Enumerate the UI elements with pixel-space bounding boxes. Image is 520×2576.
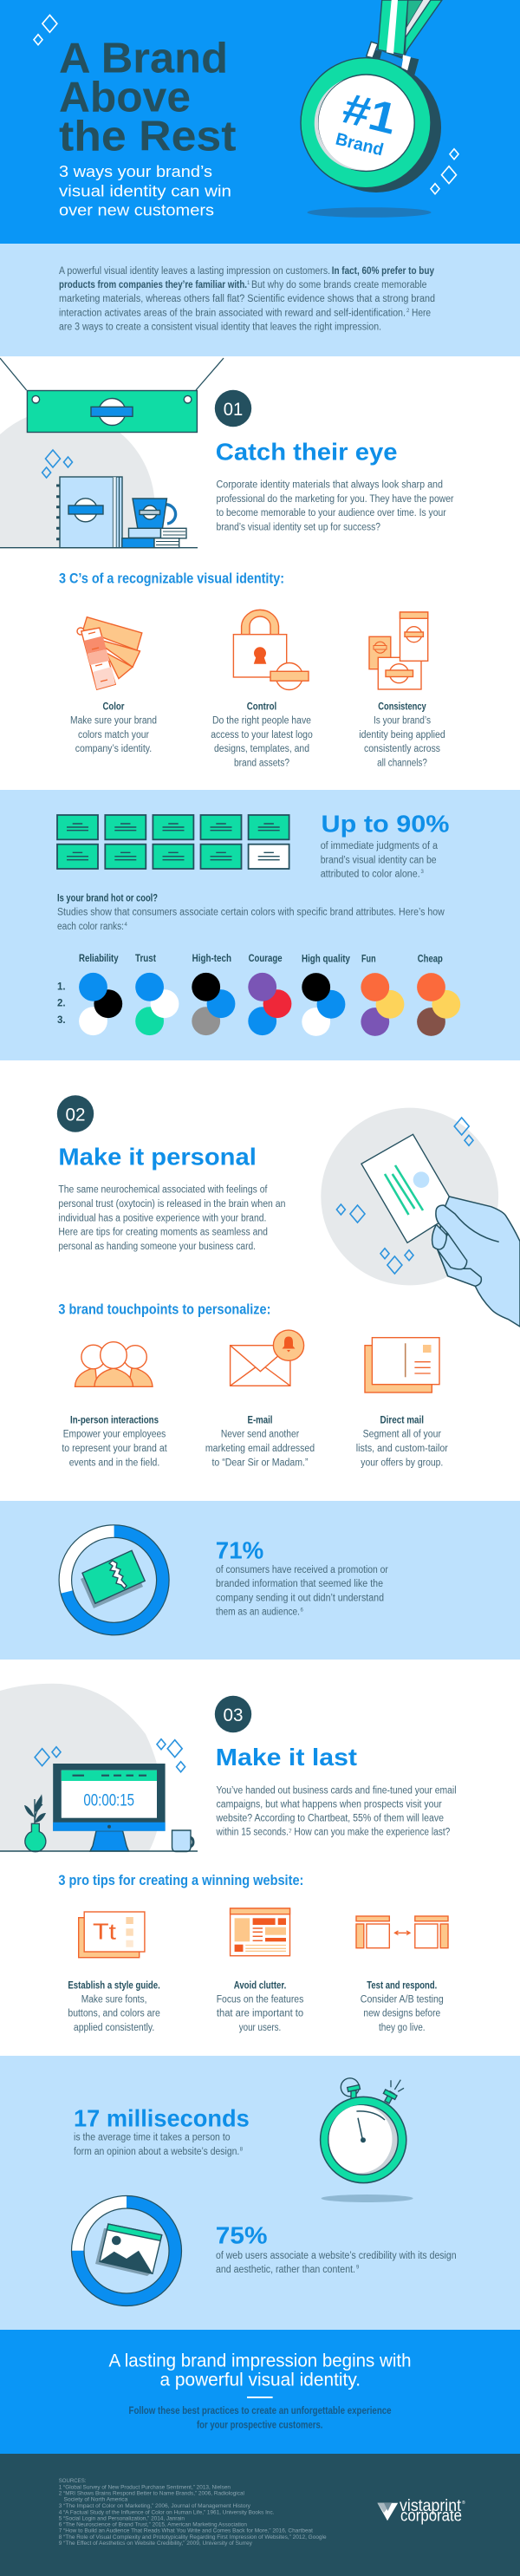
icon: sparkles left (34, 15, 57, 45)
icon: people (75, 1342, 153, 1386)
sources: 3 “The Impact of Color on Marketing,” 2006, Journal of Management History (59, 2503, 251, 2509)
text: direct mail: your offers by group. (361, 1458, 443, 1468)
subheading: 3 pro tips for creating a winning website: (58, 1872, 303, 1888)
illustration: hand with business card (321, 1108, 520, 1327)
column labels: High-tech (192, 954, 231, 964)
text: consistency: Consistency (378, 701, 426, 712)
icon: a/b test (356, 1916, 448, 1948)
cta text: for your prospective customers. (197, 2420, 322, 2430)
text: avoid clutter: your users. (239, 2023, 281, 2033)
paragraph (217, 480, 454, 532)
stat: up to 90%: of immediate judgments of a (321, 841, 439, 851)
paragraph: personal trust (oxytocin) is released in the brain when an (58, 1199, 285, 1210)
text: consistency: consistently across (364, 744, 440, 754)
cta heading (109, 2351, 411, 2390)
logo: vistaprint corporate: corporate (400, 2507, 462, 2525)
sources: 2 “MRI Shows Brains Respond Better to Name Brands,” 2006, Radiological (59, 2491, 245, 2497)
rank numbers: 2. (57, 998, 66, 1008)
stat: 71%: of consumers have received a promotion or (216, 1565, 388, 1575)
text: direct mail (356, 1416, 448, 1468)
icon: web layout (231, 1908, 289, 1956)
stat: 71%: 71% (216, 1537, 263, 1564)
stat: 17 milliseconds: is the average time it takes a person to (74, 2133, 231, 2143)
paragraph: campaigns, but what happens when prospects visit your (217, 1800, 442, 1810)
subheading: 3 C’s of a recognizable visual identity: (59, 570, 284, 586)
text: hot or cool: 4 (125, 923, 128, 928)
text: hot or cool: Studies show that consumers associate certain colors with specific brand attributes. Here’s how (57, 908, 445, 918)
stat: up to 90%: 3 (421, 870, 425, 875)
logo: vistaprint corporate: ® (462, 2500, 465, 2506)
heading: Make it personal (58, 1143, 257, 1170)
stat: 75%: and aesthetic, rather than content. (216, 2265, 355, 2275)
stat: 17 milliseconds: 8 (240, 2147, 244, 2152)
title: A Brand (59, 35, 228, 82)
column labels: Fun (361, 955, 376, 965)
stat: 71% (216, 1537, 388, 1618)
text: hot or cool: each color ranks: (57, 922, 124, 932)
icon: consistency cards (369, 612, 428, 689)
text: in-person: events and in the field. (69, 1458, 159, 1468)
paragraph: website? According to Chartbeat, 55% of them will leave (216, 1814, 444, 1824)
rank numbers: 3. (57, 1015, 66, 1026)
icon: color swatches (77, 617, 142, 689)
subheading: 3 brand touchpoints to personalize: (58, 1301, 270, 1317)
icon: medal: Brand (334, 130, 386, 160)
text: email: to “Dear Sir or Madam.” (211, 1458, 309, 1468)
icon: style guide: Tt (93, 1919, 117, 1945)
panel: speed and credibility stats (0, 2056, 520, 2330)
text: in-person: to represent your brand at (62, 1444, 167, 1454)
panel: intro (0, 244, 520, 356)
paragraph: individual has a positive experience with your brand. (58, 1213, 266, 1223)
panel: hero (0, 0, 520, 244)
subtitle: visual identity can win (59, 182, 231, 199)
text: in-person: Empower your employees (63, 1430, 166, 1440)
text: in-person (62, 1416, 167, 1468)
text: hot or cool: Is your brand hot or cool? (57, 893, 158, 903)
stat: 75%: of web users associate a website’s credibility with its design (216, 2251, 457, 2261)
stat: up to 90% (321, 810, 450, 879)
text: control: brand assets? (234, 758, 289, 768)
step number 02 (57, 1095, 94, 1132)
stat: 17 milliseconds: 17 milliseconds (74, 2105, 250, 2132)
sources: 4 “A Factual Study of the Influence of Color on Human Life,” 1961, University Books Inc. (59, 2509, 275, 2515)
sources: 5 “Social Login and Personalization,” 2014, Janrain (59, 2515, 185, 2521)
panel: footer (0, 2454, 520, 2576)
illustration: hanging sign and desk (0, 358, 224, 548)
text: consistency: all channels? (377, 758, 427, 768)
panel: intro: interaction activates areas of the brain associated with reward and self-identification. (59, 308, 406, 318)
stat: 75% (216, 2221, 457, 2275)
sources: SOURCES: (59, 2478, 87, 2484)
paragraph: The same neurochemical associated with feelings of (58, 1185, 268, 1196)
text: color: Color (102, 701, 125, 712)
subtitle: 3 ways your brand’s (59, 162, 212, 180)
paragraph: You’ve handed out business cards and fine-tuned your email (217, 1785, 456, 1796)
rank numbers: 1. (57, 982, 66, 993)
panel: intro: But why do some brands create memorable (251, 280, 426, 290)
paragraph: Corporate identity materials that always look sharp and (217, 480, 443, 491)
column labels: Reliability (79, 954, 119, 964)
panel: intro: Here (412, 308, 431, 318)
heading: Catch their eye (216, 439, 397, 466)
icon: stopwatch (321, 2078, 406, 2183)
panel: intro: products from companies they’re familiar with. (59, 280, 247, 290)
chart: donut 71% (59, 1525, 169, 1635)
panel: section 3 make it last (0, 1684, 456, 2033)
stat: up to 90%: brand’s visual identity can be (321, 855, 437, 865)
sources: 7 “How to Build an Audience That Reads What You Write and Comes Back for More,” 2016, Chartbeat (59, 2528, 313, 2534)
text: test and respond: Consider A/B testing (361, 1994, 444, 2005)
column labels (79, 954, 443, 965)
chart: donut 75% (71, 2195, 182, 2306)
paragraph (58, 1185, 285, 1252)
illustration: monitor on desk: 00:00:15 (83, 1791, 134, 1810)
step number 03 (215, 1696, 251, 1732)
panel: section 1 catch their eye (0, 358, 454, 768)
text: control: Do the right people have (212, 716, 311, 727)
stat: up to 90%: Up to 90% (321, 810, 450, 837)
text: style guide: applied consistently. (74, 2023, 154, 2033)
step number 03: 03 (224, 1705, 243, 1725)
panel: section 2 make it personal (57, 1095, 520, 1468)
text: direct mail: Segment all of your (363, 1430, 441, 1440)
paragraph: brand’s visual identity set up for success? (217, 522, 380, 532)
pictogram: 9 of 10 cards (57, 815, 289, 869)
text: email: marketing email addressed (205, 1444, 315, 1454)
column labels: Cheap (418, 955, 443, 965)
stopwatch shadow (322, 2194, 413, 2202)
text: control (211, 701, 313, 768)
illustration: monitor on desk (0, 1684, 198, 1852)
title: the Rest (59, 113, 236, 160)
cta heading: a powerful visual identity. (159, 2371, 361, 2390)
text: color: company’s identity. (75, 744, 152, 754)
panel: 71 percent stat (0, 1501, 520, 1660)
text: consistency (359, 701, 445, 768)
stat: 71%: company sending it out didn’t understand (216, 1594, 384, 1604)
icon: email (231, 1330, 304, 1386)
text: avoid clutter (217, 1980, 304, 2033)
stat: up to 90%: attributed to color alone. (321, 869, 420, 879)
text: control: access to your latest logo (211, 730, 313, 740)
paragraph: Here are tips for creating moments as seamless and (58, 1228, 268, 1238)
title: Above (59, 74, 191, 121)
column labels: Trust (135, 954, 156, 964)
text: email (205, 1416, 315, 1468)
text: hot or cool (57, 893, 445, 932)
text: consistency: Is your brand’s (374, 716, 431, 727)
text: test and respond: they go live. (379, 2023, 426, 2033)
icon: medal (301, 0, 442, 192)
panel: intro: 1 (247, 281, 250, 286)
stat: 75%: 9 (356, 2265, 360, 2270)
subtitle: over new customers (59, 201, 214, 219)
chart: colour rankings (79, 973, 460, 1036)
icon: medal: #1 (338, 83, 402, 144)
panel: intro: 2 (406, 309, 410, 314)
text: consistency: identity being applied (359, 730, 445, 740)
icon: padlock (233, 610, 309, 690)
sources: 6 “The Neuroscience of Brand Trust,” 2015, American Marketing Association (59, 2522, 247, 2528)
text: color: colors match your (78, 730, 149, 740)
paragraph: within 15 seconds.⁷ How can you make the experience last? (216, 1828, 450, 1838)
text: color (70, 701, 157, 754)
paragraph: professional do the marketing for you. They have the power (217, 494, 454, 505)
text: style guide (68, 1980, 160, 2033)
stat: 17 milliseconds: form an opinion about a website’s design. (74, 2147, 239, 2157)
paragraph: to become memorable to your audience over time. Is your (217, 508, 446, 518)
step number 01: 01 (224, 400, 243, 420)
stat: 17 milliseconds (74, 2105, 250, 2157)
text: direct mail: lists, and custom-tailor (356, 1444, 448, 1454)
step number 01 (215, 390, 251, 427)
text: style guide: Make sure fonts, (81, 1994, 147, 2005)
icon: sparkles right (431, 149, 458, 194)
text: in-person: In-person interactions (70, 1416, 159, 1426)
heading: Make it last (216, 1744, 357, 1771)
panel: color stats (0, 790, 520, 1060)
stat: 71%: branded information that seemed like the (216, 1579, 383, 1589)
sources: 8 “The Role of Visual Complexity and Prototypicality Regarding First Impression of Websites,” 2012, Google (59, 2534, 327, 2540)
cta text: Follow these best practices to create an unforgettable experience (128, 2406, 392, 2416)
sources (59, 2478, 327, 2547)
column labels: High quality (302, 955, 351, 965)
text: avoid clutter: Avoid clutter. (234, 1980, 286, 1991)
icon: postcards (365, 1338, 439, 1392)
text: style guide: buttons, and colors are (68, 2009, 160, 2019)
text: email: E-mail (248, 1416, 272, 1426)
text: control: designs, templates, and (214, 744, 309, 754)
panel: call to action (0, 2330, 520, 2454)
icon: style guide (79, 1912, 145, 1958)
step number 02: 02 (66, 1105, 85, 1125)
text: avoid clutter: that are important to (217, 2009, 303, 2019)
paragraph (216, 1785, 456, 1838)
panel: intro: A powerful visual identity leaves a lasting impression on customers. (59, 266, 330, 277)
text: style guide: Establish a style guide. (68, 1980, 160, 1991)
medal shadow (307, 207, 432, 218)
panel: intro: In fact, 60% prefer to buy (332, 266, 435, 277)
text: test and respond: new designs before (363, 2009, 440, 2019)
subtitle (59, 162, 231, 219)
stat: 71%: them as an audience. (216, 1608, 300, 1618)
sources: Society of North America (64, 2497, 128, 2503)
sources: 9 “The Effect of Aesthetics on Website Credibility,” 2009, University of Surrey (59, 2540, 253, 2547)
stat: 71%: 6 (300, 1608, 303, 1613)
rank numbers (57, 982, 66, 1026)
sources: 1 “Global Survey of New Product Purchase Sentiment,” 2013, Nielsen (59, 2484, 231, 2490)
text: email: Never send another (221, 1430, 299, 1440)
stat: 75%: 75% (216, 2221, 268, 2248)
text: color: Make sure your brand (70, 716, 157, 727)
logo: vistaprint corporate: vistaprint (400, 2497, 462, 2515)
logo: vistaprint corporate (378, 2497, 465, 2525)
text: test and respond: Test and respond. (367, 1980, 437, 1991)
panel: intro: are 3 ways to create a consistent visual identity that leaves the right impression. (59, 323, 381, 333)
text: direct mail: Direct mail (380, 1416, 424, 1426)
text: avoid clutter: Focus on the features (217, 1994, 304, 2005)
cta heading: A lasting brand impression begins with (109, 2351, 411, 2371)
text: control: Control (247, 701, 276, 712)
paragraph: personal as handing someone your business card. (58, 1242, 256, 1252)
text: test and respond (361, 1980, 444, 2033)
column labels: Courage (249, 954, 283, 964)
cta text (128, 2406, 392, 2430)
title (59, 35, 236, 160)
panel: intro: marketing materials, whereas others fall flat? Scientific evidence shows that a strong brand (59, 294, 435, 304)
